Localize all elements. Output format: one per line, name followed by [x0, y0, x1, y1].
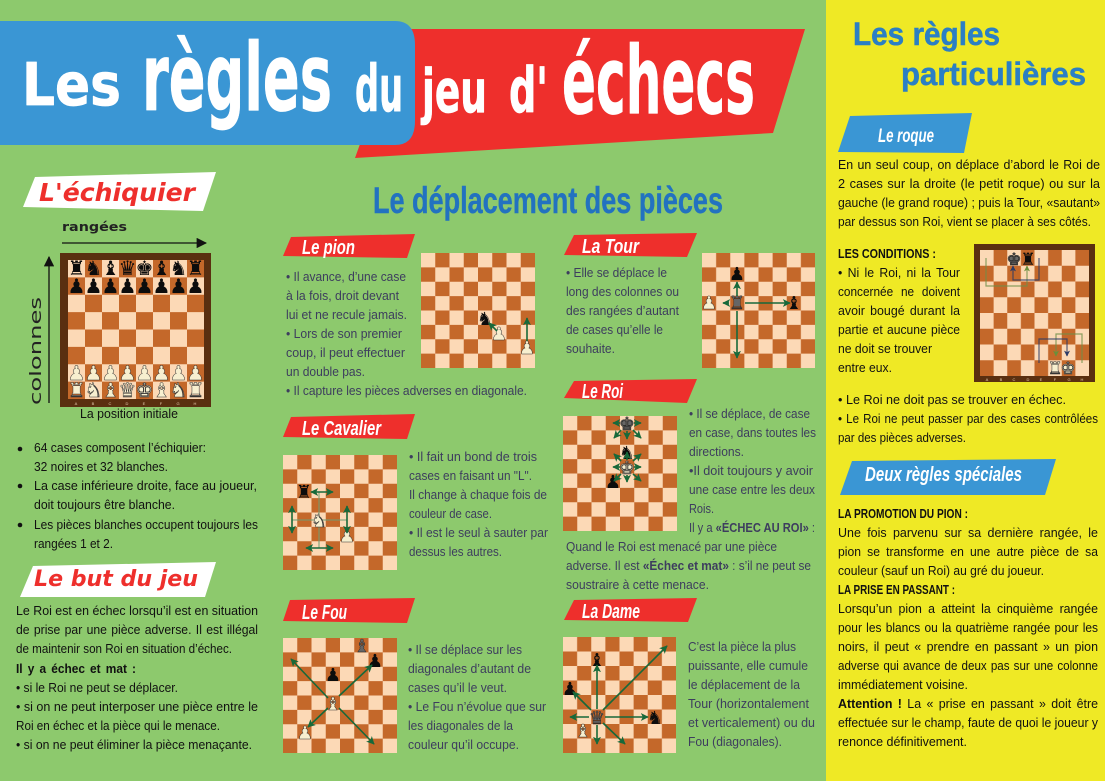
- board: rook: ♝: [786, 293, 802, 314]
- text: goal of the game: • si le Roi ne peut se déplacer.: [16, 680, 178, 695]
- text: king restrictions: [838, 392, 1098, 445]
- label: deux règles spéciales: Deux règles spéciales: [865, 464, 1022, 486]
- text: queen rules: [688, 639, 815, 749]
- panel: yellow sidebar background: [826, 0, 1105, 781]
- text: conditions: ne doit se trouver: [838, 341, 933, 356]
- board: initial position: ♜♞♝♛♚♝♞♜: [68, 378, 204, 402]
- label: colonnes: colonnes: [26, 297, 45, 405]
- board: king: [563, 414, 677, 531]
- board: bishop: ♟: [325, 665, 341, 686]
- text: king rules: une case entre les deux: [689, 482, 815, 497]
- text: king rules: [566, 406, 816, 592]
- board: initial position: ABCDEFGH: [75, 401, 197, 406]
- text: pawn rules: • Il capture les pièces adverses en diagonale.: [286, 383, 527, 398]
- board: castling: ♜: [1020, 250, 1036, 270]
- title banner: [0, 21, 805, 158]
- text: rook rules: des rangées d’autant: [566, 303, 679, 318]
- text: goal of the game: de prise par une pièce adverse. Il est illégal: [16, 622, 258, 637]
- list: chessboard facts: 64 cases composent l’échiquier:: [34, 440, 206, 455]
- board: initial position: ♜♞♝♛♚♝♞♜: [68, 256, 204, 280]
- text: king rules: en case, dans toutes les: [689, 425, 816, 440]
- label: le pion: Le pion: [302, 237, 355, 259]
- panel: la dame: [562, 598, 815, 753]
- text: queen rules: et verticalement) ou du: [688, 715, 815, 730]
- list: chessboard facts: La case inférieure droite, face au joueur,: [34, 478, 257, 493]
- text: king restrictions: par des pièces adverses.: [838, 430, 966, 445]
- text: king restrictions: • Le Roi ne doit pas se trouver en échec.: [838, 392, 1066, 407]
- text: king rules: Il y a «ÉCHEC AU ROI» :: [689, 520, 815, 535]
- text: rook rules: • Elle se déplace le: [566, 265, 667, 280]
- text: promotion: [838, 506, 1099, 578]
- panel: les règles particulières: [838, 16, 1101, 749]
- text: pawn rules: coup, il peut effectuer: [286, 345, 406, 360]
- heading: le but du jeu: [20, 562, 216, 597]
- board: queen: ♝: [575, 721, 591, 742]
- heading: les règles particulières: Les règles: [853, 16, 1000, 52]
- text: bishop rules: les diagonales de la: [408, 718, 514, 733]
- label: le fou: [283, 598, 415, 624]
- board: knight: [283, 455, 397, 570]
- text: conditions: concernée ne doivent: [838, 284, 960, 299]
- label: la tour: [564, 233, 697, 258]
- label: le cavalier: Le Cavalier: [302, 418, 382, 440]
- caption: La position initiale: [80, 406, 178, 421]
- board: rook: [701, 253, 815, 368]
- board: bishop: ♟: [367, 651, 383, 672]
- list: chessboard facts: [18, 440, 258, 551]
- board: castling: [974, 244, 1095, 382]
- title red ribbon: [355, 29, 805, 158]
- text: pawn rules: lui et ne recule jamais.: [286, 307, 407, 322]
- title text: du: [355, 53, 403, 127]
- panel: le pion: [283, 234, 535, 398]
- board: castling: ♚: [1060, 359, 1076, 379]
- heading: le déplacement des pièces: Le déplacement des pièces: [373, 180, 723, 221]
- title text: jeu: [421, 57, 487, 127]
- text: bishop rules: cases qu’il le veut.: [408, 680, 507, 695]
- text: pawn rules: • Lors de son premier: [286, 326, 403, 341]
- label: rangées: rangées: [62, 220, 127, 234]
- label: la tour: La Tour: [582, 236, 640, 258]
- text: queen rules: puissante, elle cumule: [688, 658, 808, 673]
- text: king rules: directions.: [689, 444, 744, 459]
- board: queen: ♝: [589, 650, 605, 671]
- board: bishop: ♟: [297, 723, 313, 744]
- title text: règles: [142, 24, 332, 133]
- text: goal of the game: Roi en échec et la pièce qui le menace.: [16, 718, 220, 733]
- text: en passant: Lorsqu’un pion a atteint la cinquième rangée: [838, 601, 1098, 616]
- board: king: ♚: [619, 458, 635, 479]
- text: conditions: entre eux.: [838, 360, 892, 375]
- panel: la tour: [564, 233, 815, 368]
- text: pawn rules: [286, 269, 527, 398]
- label: le roi: Le Roi: [582, 381, 623, 403]
- board: castling: ♚: [1006, 250, 1022, 270]
- text: pawn rules: à la fois, droit devant: [286, 288, 399, 303]
- list: chessboard facts: rangées 1 et 2.: [34, 536, 113, 551]
- heading: l'échiquier: L'échiquier: [39, 178, 197, 207]
- title text: d': [509, 54, 548, 127]
- text: queen rules: Fou (diagonales).: [688, 734, 782, 749]
- text: conditions: LES CONDITIONS :: [838, 246, 936, 261]
- text: rook rules: long des colonnes ou: [566, 284, 679, 299]
- list: chessboard facts: Les pièces blanches occupent toujours les: [34, 517, 258, 532]
- text: king rules: soustraire à cette menace.: [566, 577, 709, 592]
- heading: le but du jeu: Le but du jeu: [34, 567, 198, 592]
- board: pawn: [421, 253, 535, 368]
- text: rook rules: souhaite.: [566, 341, 615, 356]
- label: la dame: [564, 598, 697, 623]
- board: queen: ♟: [562, 679, 578, 700]
- panel: l'échiquier: [18, 172, 258, 551]
- label: la dame: La Dame: [582, 601, 640, 623]
- text: king rules: Quand le Roi est menacé par une pièce: [566, 539, 777, 554]
- text: goal of the game: [16, 603, 258, 752]
- board: initial position: ♟♟♟♟♟♟♟♟: [68, 361, 204, 385]
- board: queen: ♛: [589, 708, 605, 729]
- text: goal of the game: Le Roi est en échec lorsqu’il est en situation: [16, 603, 258, 618]
- text: castling description: 2 cases sur la droite (le petit roque) ou sur la: [838, 176, 1101, 191]
- text: king rules: • Il se déplace, de case: [689, 406, 810, 421]
- panel: le roi: [563, 379, 816, 592]
- text: king rules: adverse. Il est «Échec et mat» : s’il ne peut se: [566, 558, 811, 573]
- text: conditions: [838, 246, 961, 375]
- text: goal of the game: Il y a échec et mat :: [16, 661, 136, 676]
- board: pawn: ♟: [519, 338, 535, 359]
- text: queen rules: C’est la pièce la plus: [688, 639, 796, 654]
- text: king rules: Rois.: [689, 501, 714, 516]
- board: king: ♚: [619, 414, 635, 435]
- text: bishop rules: couleur qu’il occupe.: [408, 737, 519, 752]
- board: queen: ♞: [647, 708, 663, 729]
- board: rook: ♜: [729, 293, 745, 314]
- label: le roque: Le roque: [878, 126, 934, 147]
- panel: le cavalier: [283, 414, 549, 570]
- arrow: rangées: [62, 242, 206, 244]
- text: bishop rules: [408, 642, 547, 752]
- board: initial position: ♟♟♟♟♟♟♟♟: [68, 274, 204, 298]
- board: knight: ♞: [311, 511, 327, 532]
- board: bishop: [283, 636, 397, 753]
- title text: [22, 24, 755, 136]
- board: knight: ♟: [339, 526, 355, 547]
- title text: Les: [22, 50, 121, 119]
- text: goal of the game: • si on ne peut interposer une pièce entre le: [16, 699, 258, 714]
- text: pawn rules: un double pas.: [286, 364, 365, 379]
- title text: échecs: [562, 27, 755, 136]
- text: castling description: [838, 157, 1101, 229]
- board: bishop: ♝: [325, 694, 341, 715]
- panel: le but du jeu: [16, 562, 258, 752]
- heading: les règles particulières: particulières: [901, 56, 1086, 92]
- text: promotion: Une fois parvenu sur sa dernière rangée, le: [838, 525, 1098, 540]
- board: bishop: ♝: [354, 636, 370, 657]
- label: le roque: [838, 113, 972, 153]
- text: knight rules: Il change à chaque fois de: [409, 487, 547, 502]
- label: le fou: Le Fou: [302, 602, 347, 624]
- board: castling: ♜: [1047, 359, 1063, 379]
- board: knight: ♜: [296, 482, 312, 503]
- board: rook: ♟: [701, 293, 717, 314]
- text: en passant: [838, 582, 1098, 749]
- text: queen rules: Tour (horizontalement: [688, 696, 809, 711]
- list: chessboard facts: doit toujours être blanche.: [34, 497, 175, 512]
- label: le pion: [283, 234, 415, 259]
- board: king: ♟: [605, 472, 621, 493]
- text: conditions: • Ni le Roi, ni la Tour: [838, 265, 961, 280]
- text: knight rules: • Il est le seul à sauter par: [409, 525, 549, 540]
- text: knight rules: [409, 449, 549, 559]
- text: en passant: renonce définitivement.: [838, 734, 967, 749]
- text: rook rules: [566, 265, 679, 356]
- board: pawn: ♞: [477, 309, 493, 330]
- label: deux règles spéciales: [840, 459, 1056, 495]
- board: initial position: [60, 253, 211, 407]
- board: rook: ♟: [729, 264, 745, 285]
- text: rook rules: de cases qu’elle le: [566, 322, 663, 337]
- text: en passant: LA PRISE EN PASSANT :: [838, 582, 955, 597]
- title blue block: [0, 21, 415, 145]
- text: king rules: •Il doit toujours y avoir: [689, 463, 814, 478]
- text: bishop rules: • Le Fou n’évolue que sur: [408, 699, 547, 714]
- text: en passant: Attention ! La « prise en passant » doit être: [838, 696, 1098, 711]
- text: pawn rules: • Il avance, d’une case: [286, 269, 406, 284]
- board: queen: [562, 637, 676, 753]
- board: pawn: ♟: [491, 324, 507, 345]
- panel: le fou: [283, 598, 547, 753]
- text: en passant: immédiatement voisine.: [838, 677, 968, 692]
- text: conditions: avoir bougé durant la: [838, 303, 961, 318]
- arrow: colonnes: [48, 257, 50, 403]
- text: queen rules: le déplacement de la: [688, 677, 801, 692]
- text: promotion: couleur (sauf un Roi) au gré du joueur.: [838, 563, 1044, 578]
- heading: l'échiquier: [23, 172, 216, 211]
- text: knight rules: couleur de case.: [409, 506, 492, 521]
- text: bishop rules: • Il se déplace sur les: [408, 642, 522, 657]
- text: knight rules: cases en faisant un "L".: [409, 468, 532, 483]
- text: knight rules: dessus les autres.: [409, 544, 502, 559]
- text: goal of the game: • si on ne peut éliminer la pièce menaçante.: [16, 737, 252, 752]
- label: le cavalier: [283, 414, 415, 440]
- text: conditions: partie et aucune pièce: [838, 322, 960, 337]
- text: bishop rules: diagonales d’autant de: [408, 661, 531, 676]
- list: chessboard facts: 32 noires et 32 blanches.: [34, 459, 168, 474]
- board: king: ♞: [619, 443, 635, 464]
- label: le roi: [564, 379, 697, 403]
- text: en passant: noirs, il peut « prendre en passant » un pion: [838, 639, 1098, 654]
- heading: les règles particulières: [853, 16, 1086, 92]
- text: goal of the game: de maintenir son Roi en situation d’échec.: [16, 641, 232, 656]
- text: knight rules: • Il fait un bond de trois: [409, 449, 537, 464]
- text: castling description: En un seul coup, on déplace d’abord le Roi de: [838, 157, 1100, 172]
- board: castling: ABCDEFGH: [986, 377, 1084, 382]
- text: promotion: LA PROMOTION DU PION :: [838, 506, 968, 521]
